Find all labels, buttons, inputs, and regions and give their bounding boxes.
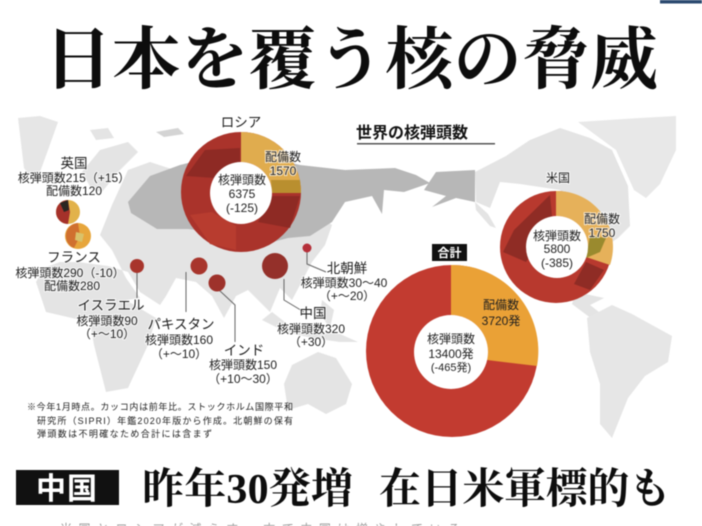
label: North Korea: 北朝鮮 <box>327 261 367 276</box>
label: China: 核弾頭数320 <box>277 321 345 336</box>
label: United Kingdom: 核弾頭数215（+15） <box>18 170 130 185</box>
South America <box>587 305 672 438</box>
label: France: フランス <box>47 250 101 265</box>
title: 日本を覆う核の脅威 <box>44 22 658 98</box>
marker: Pakistan <box>190 258 208 274</box>
label: Israel <box>76 298 145 341</box>
label: Pakistan: パキスタン <box>147 317 215 332</box>
Eurasia and North Africa, light <box>36 162 332 392</box>
Canada and USA <box>475 128 630 250</box>
Alaska, dark <box>424 170 475 207</box>
South East Asia and Indonesia <box>262 312 358 342</box>
marker: France <box>65 223 91 249</box>
footnote <box>27 401 293 439</box>
donut: United States: (-385) <box>541 256 573 270</box>
label: Pakistan: （+〜10） <box>151 347 207 361</box>
donut: Russia: 1570 <box>270 164 297 178</box>
label: Israel: （+〜10） <box>79 327 135 341</box>
Russia label: ロシア <box>221 115 261 130</box>
total warheads: 核弾頭数 <box>427 331 475 346</box>
label: China: （+30） <box>289 335 333 349</box>
label: France <box>15 250 125 293</box>
donut: Russia <box>181 115 301 252</box>
donut: United States: 5800 <box>544 242 571 256</box>
subheading: 昨年30発増 <box>142 466 353 513</box>
label: North Korea <box>301 261 388 303</box>
total label: 合計 <box>437 245 462 260</box>
marker: China <box>262 253 288 279</box>
total deployed: 配備数 <box>483 297 519 312</box>
label: Israel: 核弾頭数90 <box>76 313 138 328</box>
label: Pakistan: 核弾頭数160 <box>145 332 213 347</box>
Australia <box>284 352 352 414</box>
donut: United States <box>500 171 620 303</box>
Central America <box>572 292 604 322</box>
donut: total <box>366 244 538 437</box>
donut: Russia: 6375 <box>229 187 256 201</box>
marker: India <box>208 274 226 292</box>
donut: total: 3720発 <box>482 314 520 328</box>
donut: Russia: (-125) <box>226 201 258 215</box>
US total: 核弾頭数 <box>533 228 581 243</box>
label: India <box>208 343 278 386</box>
map heading <box>356 123 495 144</box>
label: United Kingdom <box>18 155 130 198</box>
leader lines <box>137 252 326 342</box>
corner mark <box>660 0 702 4</box>
label: France: 配備数280 <box>44 278 100 293</box>
label: France: 核弾頭数290（-10） <box>15 265 125 280</box>
subheading <box>142 466 671 513</box>
label: North Korea: 核弾頭数30〜40 <box>301 275 388 290</box>
Russia deployed: 配備数 <box>265 149 301 164</box>
subheading: 在日米軍標的も <box>379 466 671 513</box>
label: North Korea: （+〜20） <box>319 289 375 303</box>
label: India: 核弾頭数150 <box>209 357 277 372</box>
map heading: 世界の核弾頭数 <box>356 123 468 142</box>
marker: North Korea <box>302 244 312 252</box>
world map <box>18 116 676 438</box>
section tag: China <box>16 470 119 506</box>
label: China: 中国 <box>300 306 326 321</box>
total label <box>432 244 467 261</box>
footnote: 弾頭数は不明確なため合計には含まず <box>37 428 212 439</box>
US deployed: 配備数 <box>584 211 620 226</box>
label: United Kingdom: 英国 <box>60 155 88 171</box>
section tag: China: 中国 <box>36 473 98 506</box>
marker: United Kingdom <box>56 200 80 224</box>
footnote: ※今年1月時点。カッコ内は前年比。ストックホルム国際平和 <box>27 401 293 412</box>
marker: Israel <box>130 259 144 273</box>
Scandinavia and arctic islands <box>82 142 138 192</box>
Russia total: 核弾頭数 <box>218 172 266 187</box>
donut: total: 13400発 <box>428 347 474 361</box>
footnote: 研究所（SIPRI）年鑑2020年版から作成。北朝鮮の保有 <box>37 415 293 426</box>
Greenland <box>578 116 676 198</box>
label: Israel: イスラエル <box>77 298 145 313</box>
donut: total: (-465発) <box>431 360 471 374</box>
label: India: （+10〜30） <box>208 372 278 386</box>
label: Pakistan <box>145 317 215 361</box>
label: India: インド <box>224 343 264 358</box>
Russia, dark <box>128 150 430 244</box>
label: United Kingdom: 配備数120 <box>46 183 102 198</box>
donut: United States: 1750 <box>589 226 616 240</box>
US label: 米国 <box>546 171 570 185</box>
label: China <box>277 306 345 349</box>
